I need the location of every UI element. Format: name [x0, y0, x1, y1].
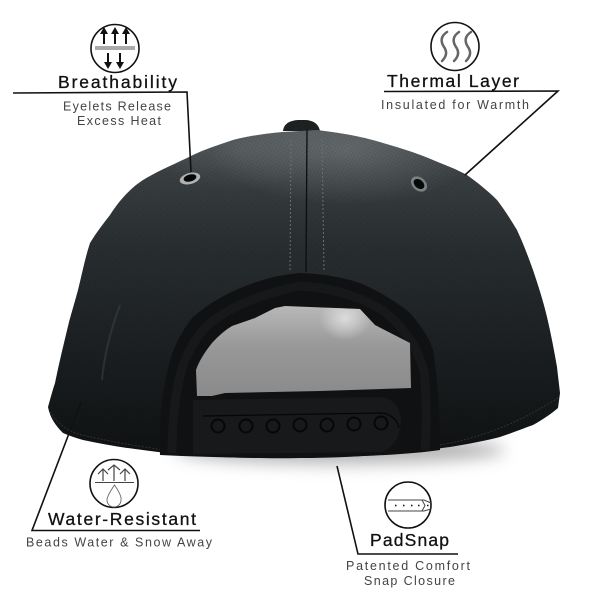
leader line — [32, 402, 200, 530]
stitching left — [290, 140, 291, 272]
stitching right — [322, 140, 324, 272]
right eyelet — [408, 173, 430, 195]
callout: water-resistant — [26, 402, 213, 550]
heading: Thermal Layer — [387, 71, 519, 91]
description: Beads Water & Snow Away — [26, 536, 213, 550]
heading: Breathability — [58, 72, 177, 92]
strap arch — [160, 273, 440, 458]
snap strap — [193, 397, 401, 454]
cap — [48, 120, 560, 458]
head opening — [196, 306, 411, 396]
heading: PadSnap — [370, 530, 449, 550]
callout: thermal layer — [381, 22, 558, 175]
callout: breathability — [13, 24, 191, 172]
description: Eyelets Release — [63, 100, 171, 114]
center seam — [306, 130, 307, 272]
description second line: Excess Heat — [77, 114, 162, 128]
leader line — [384, 91, 558, 175]
floor shadow — [175, 436, 505, 464]
snap holes — [212, 416, 388, 432]
description: Patented Comfort — [346, 559, 471, 573]
icon: breathability — [91, 24, 139, 72]
left eyelet — [178, 170, 202, 187]
icon: water drop — [90, 460, 138, 508]
description: Insulated for Warmth — [381, 98, 529, 112]
crown — [48, 130, 560, 458]
icon: snap strap — [385, 482, 431, 528]
fold highlights — [102, 305, 120, 380]
heading: Water-Resistant — [48, 509, 196, 529]
leader line — [13, 92, 191, 172]
opening highlight — [324, 308, 368, 337]
description second line: Snap Closure — [364, 574, 455, 588]
arch binding — [172, 286, 426, 453]
top button — [283, 120, 320, 131]
callout: padsnap — [337, 466, 471, 588]
leader line — [337, 466, 458, 554]
brim band stitching — [50, 398, 558, 450]
icon: thermal waves — [431, 22, 479, 70]
